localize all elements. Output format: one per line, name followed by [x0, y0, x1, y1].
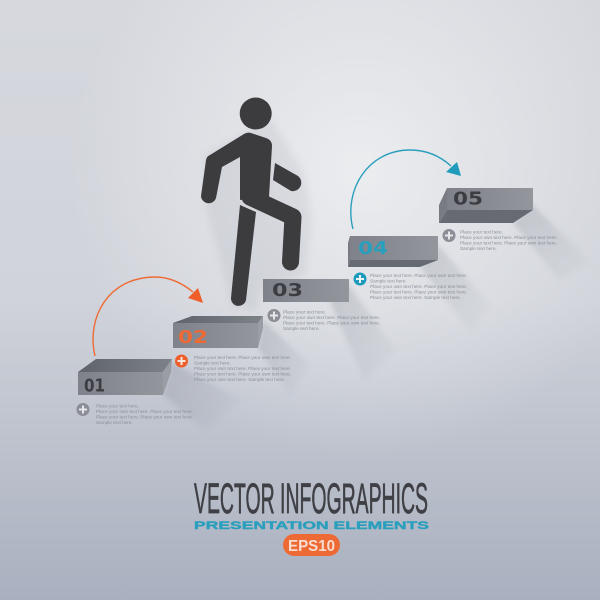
copy 04: Sample text here.	[370, 278, 407, 284]
step 02	[173, 316, 263, 348]
copy 05: Place your text here. Place your own text here.	[460, 240, 557, 246]
text block 05	[442, 229, 557, 251]
copy 01	[96, 404, 193, 425]
long shadows	[163, 205, 590, 430]
standing leg	[231, 205, 256, 306]
copy 03: Place your text here.	[283, 310, 326, 314]
copy 05: Place your text here.	[460, 230, 503, 234]
copy 01: Sample text here.	[96, 420, 133, 425]
step 05	[439, 188, 533, 223]
copy 03	[283, 310, 380, 331]
copy 05: Sample text here.	[460, 246, 497, 251]
step 04 front face	[350, 236, 438, 260]
badge: EPS10	[283, 534, 340, 556]
text block 01	[76, 403, 193, 425]
badge: EPS10: EPS10	[288, 538, 335, 555]
step 05 number: 05	[453, 188, 483, 210]
text block 04	[354, 272, 467, 300]
copy 03: Sample text here.	[283, 326, 320, 331]
copy 02	[194, 355, 291, 382]
copy 01: Place your text here.	[96, 404, 139, 408]
copy 05	[460, 230, 557, 251]
copy 02: Place your text here. Place your own text here.	[194, 355, 291, 360]
step 02 side face	[258, 316, 263, 348]
step 01 number: 01	[84, 376, 105, 396]
step 03	[263, 279, 349, 302]
person shadow	[205, 118, 312, 310]
copy 04: Place your own text here. Sample text here.	[370, 295, 461, 300]
step 04 bottom face	[348, 260, 438, 267]
step 04 left face	[348, 236, 350, 267]
step 02 number: 02	[178, 327, 208, 348]
text block 02	[175, 354, 291, 382]
copy 01: Place your text here. Place your own text here.	[96, 414, 193, 420]
step 05 bottom face	[439, 210, 533, 223]
copy 05: Place your own text here. Place your text here.	[460, 235, 557, 240]
back arm	[273, 163, 301, 191]
copy 02: Place your own text here. Place your text here.	[194, 366, 291, 371]
copy 02: Place your text here. Place your own text here.	[194, 372, 291, 376]
step 03 front face	[263, 279, 349, 302]
plus icon 04	[354, 272, 366, 286]
torso and front arm	[201, 133, 272, 203]
step 04 number: 04	[358, 238, 388, 259]
copy 01: Place your own text here. Place your text here.	[96, 409, 193, 414]
raised leg	[250, 197, 293, 262]
copy 04	[370, 273, 467, 300]
step 01 side face	[163, 359, 172, 395]
plus icon 01	[76, 403, 90, 416]
plus icon 02	[175, 354, 188, 368]
copy 04: Place your text here. Place your own text here.	[370, 273, 467, 278]
step 01	[78, 359, 172, 396]
step 02 front face	[173, 323, 258, 348]
step 01 front face	[78, 372, 163, 395]
copy 04: Place your own text here. Place your text here.	[370, 284, 467, 289]
copy 03: Place your own text here. Place your text here.	[283, 315, 380, 320]
step 05 left face	[439, 188, 447, 223]
copy 04: Place your text here. Place your own text here.	[370, 290, 467, 294]
subtitle: PRESENTATION ELEMENTS	[194, 520, 429, 532]
copy 02: Place your own text here. Sample text here.	[194, 377, 285, 382]
step 02 top face	[173, 316, 263, 323]
text block 03	[268, 309, 380, 331]
copy 02: Sample text here.	[194, 360, 231, 366]
arrow: blue	[351, 150, 461, 229]
plus icon 03	[268, 309, 280, 322]
arrow: orange	[93, 277, 203, 356]
step 05 front face	[447, 188, 533, 210]
icon: climbing person	[201, 98, 301, 306]
step 03 number: 03	[272, 280, 303, 301]
plus icon 05	[442, 229, 456, 242]
copy 03: Place your text here. Place your own text here.	[283, 320, 380, 326]
head	[240, 98, 272, 130]
step 01 top face	[78, 359, 172, 372]
step 04	[348, 236, 438, 267]
